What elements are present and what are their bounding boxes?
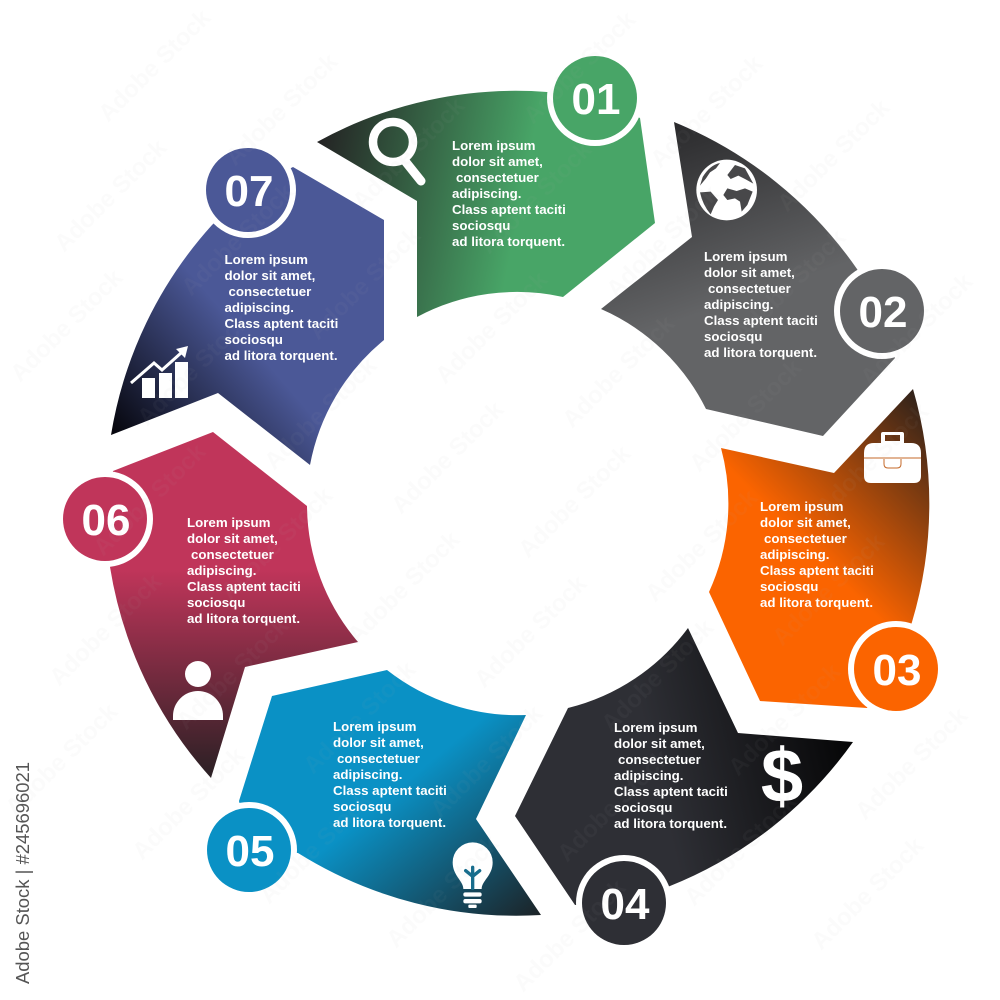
text block 01: dolor sit amet, [452,154,543,169]
icon: toolbox [864,432,921,483]
segment shape 05 [239,670,541,916]
text: Adobe Stock [381,830,505,953]
text block 06: Class aptent taciti [187,579,301,594]
text block 04: Lorem ipsum [614,720,698,735]
text block 02: Lorem ipsum [704,249,788,264]
text block 04: sociosqu [614,800,672,815]
panel: step 06 [57,432,358,778]
icon: globe [696,160,757,220]
text: Adobe Stock [347,92,471,215]
text: Adobe Stock [386,396,510,519]
text block 05: dolor sit amet, [333,735,424,750]
text block 02: consectetuer [708,281,791,296]
text block 03: ad litora torquent. [760,595,873,610]
number badge 07: 07 [225,167,273,216]
text block 01: consectetuer [456,170,539,185]
icon: person [173,661,223,720]
text: Adobe Stock [430,266,554,389]
text block 01: adipiscing. [452,186,521,201]
text block 03: dolor sit amet, [760,515,851,530]
text: Adobe Stock [640,484,764,607]
text: Adobe Stock [171,612,295,735]
text: Adobe Stock [342,526,466,649]
text block 03: Lorem ipsum [760,499,844,514]
text block 01: ad litora torquent. [452,234,565,249]
text: Adobe Stock [93,4,217,127]
number badge 03 [848,621,944,717]
text block 07: Class aptent taciti [224,316,338,331]
number badge 06 [57,471,153,567]
text block 02: Class aptent taciti [704,313,818,328]
icon: light bulb [453,842,493,908]
text: Adobe Stock [259,352,383,475]
text block 04: consectetuer [618,752,701,767]
segment shape 04 [515,628,853,905]
text: Adobe Stock [684,354,808,477]
text: Adobe Stock [601,180,725,303]
text block 04: Class aptent taciti [614,784,728,799]
text block 02: adipiscing. [704,297,773,312]
text: Adobe Stock [215,482,339,605]
text: Adobe Stock [49,134,173,257]
text: Adobe Stock [44,568,168,691]
text: Adobe Stock [254,786,378,909]
panel: step 07 [111,142,384,465]
text block 05: adipiscing. [333,767,402,782]
text: Adobe Stock [474,136,598,259]
text: Adobe Stock [772,94,896,217]
text: Adobe Stock [127,742,251,865]
text: Adobe Stock [728,224,852,347]
text block 01: sociosqu [452,218,510,233]
text: Adobe Stock [855,268,979,391]
icon: magnifying glass [373,122,421,181]
text block 07: ad litora torquent. [224,348,338,363]
text: Adobe Stock [508,874,632,997]
text: Adobe Stock [645,50,769,173]
text block 02: sociosqu [704,329,762,344]
text block 05: consectetuer [337,751,420,766]
segment shape 06 [105,432,358,778]
number badge 02: 02 [859,288,907,337]
text block 05: ad litora torquent. [333,815,446,830]
panel: step 05 [201,670,541,916]
text: Adobe Stock [811,398,935,521]
text: Adobe Stock [176,178,300,301]
number badge 05 [201,802,297,898]
text block 06: dolor sit amet, [187,531,278,546]
icon: rising bar chart [131,346,188,398]
icon: dollar sign: $ [761,734,803,819]
number badge 03: 03 [873,646,921,695]
text: Adobe Stock [469,570,593,693]
text block 06: adipiscing. [187,563,256,578]
text: Adobe Stock [850,702,974,825]
text block 07: Lorem ipsum [224,252,308,267]
text block 05: Class aptent taciti [333,783,447,798]
text block 07: sociosqu [224,332,283,347]
text block 04: dolor sit amet, [614,736,705,751]
number badge 04: 04 [601,880,650,929]
text: Adobe Stock [518,6,642,129]
text block 02: ad litora torquent. [704,345,817,360]
text block 05: Lorem ipsum [333,719,416,734]
text block 05: sociosqu [333,799,391,814]
text block 07: adipiscing. [224,300,294,315]
text: Adobe Stock [513,440,637,563]
text: Adobe Stock [5,264,129,387]
text: Adobe Stock [767,528,891,651]
text block 06: sociosqu [187,595,245,610]
text block 03: Class aptent taciti [760,563,874,578]
text block 01: Lorem ipsum [452,138,536,153]
number badge 01: 01 [572,75,620,124]
text: Adobe Stock [0,698,124,821]
text block 06: consectetuer [191,547,274,562]
panel: step 01 [317,50,655,317]
text block 03: consectetuer [764,531,847,546]
text: Adobe Stock [88,438,212,561]
text block 07: consectetuer [228,284,311,299]
text block 04: adipiscing. [614,768,683,783]
text block 06: ad litora torquent. [187,611,300,626]
segment shape 02 [601,122,895,436]
text block 03: sociosqu [760,579,818,594]
number badge 04 [576,855,672,951]
text: Adobe Stock [806,832,930,955]
text: Adobe Stock [220,48,344,171]
text block 03: adipiscing. [760,547,829,562]
text: Adobe Stock [298,656,422,779]
text block 02: dolor sit amet, [704,265,795,280]
text: Adobe Stock [132,308,256,431]
text: Adobe Stock [596,614,720,737]
text: Adobe Stock [557,310,681,433]
number badge 06: 06 [82,496,130,545]
text: Adobe Stock [303,222,427,345]
stock id caption: Adobe Stock | #245696021 [13,762,33,984]
segment shape 07 [111,167,384,465]
segment shape 03 [709,389,929,708]
text block 01: Class aptent taciti [452,202,566,217]
number badge 07 [200,142,296,238]
text block 04: ad litora torquent. [614,816,727,831]
text: Adobe Stock [723,658,847,781]
segment shape 01 [317,91,655,317]
panel: step 04 [515,628,853,951]
text: Adobe Stock [425,700,549,823]
number badge 05: 05 [226,827,274,876]
panel: step 02 [601,122,930,436]
text block 06: Lorem ipsum [187,515,270,530]
text: Adobe Stock [679,788,803,911]
number badge 02 [834,263,930,359]
number badge 01 [547,50,643,146]
panel: step 03 [709,389,944,717]
text: Adobe Stock [552,744,676,867]
text block 07: dolor sit amet, [224,268,315,283]
